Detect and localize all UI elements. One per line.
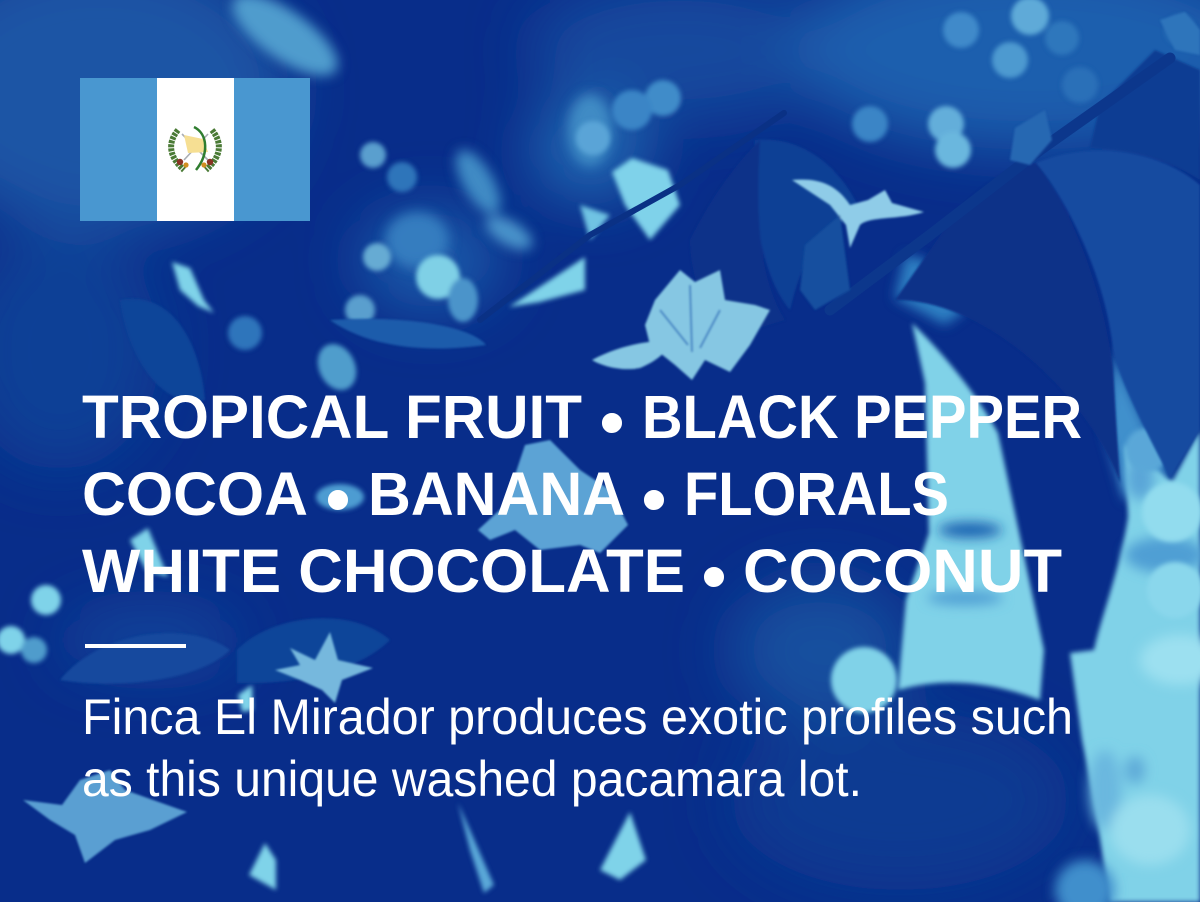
far right leaf [1036, 151, 1200, 478]
divider rule [85, 644, 186, 648]
heading: tasting notes: WHITE CHOCOLATE [82, 537, 685, 605]
flower lower left [275, 632, 373, 703]
heading: tasting notes: TROPICAL FRUIT [82, 383, 582, 451]
description text: Finca El Mirador produces exotic profiles such [82, 689, 1073, 745]
heading: tasting notes: BLACK PEPPER [642, 383, 1082, 451]
bokeh lights [0, 0, 1200, 713]
heading: tasting notes: FLORALS [684, 460, 949, 528]
flower lower centre [478, 440, 628, 553]
upper right leaf [1090, 50, 1200, 180]
flag stripes [80, 78, 310, 221]
coat of arms [171, 127, 219, 170]
blue patches in bright area [927, 456, 1200, 902]
mid-blue areas [220, 0, 1170, 500]
large dark centre leaf [895, 163, 1120, 483]
heading: tasting notes: BANANA [368, 460, 625, 528]
heading: tasting notes [82, 383, 1082, 615]
bright patches behind branches [130, 158, 680, 893]
description text [82, 689, 1073, 807]
flower upper right [792, 180, 924, 248]
bright area lower right [580, 205, 1200, 902]
description text: as this unique washed pacamara lot. [82, 751, 862, 807]
heading: tasting notes: COCOA [82, 460, 308, 528]
flower centre [592, 270, 770, 380]
buds [1160, 12, 1200, 55]
foliage leaves [60, 50, 1200, 684]
flower bottom left [23, 770, 187, 863]
left leaves [120, 299, 205, 402]
branches [480, 58, 1170, 320]
heading: tasting notes: • [600, 383, 624, 461]
heading: tasting notes: COCONUT [743, 537, 1062, 605]
heading: tasting notes: • [326, 460, 350, 538]
middle leaf [754, 139, 860, 310]
heading: tasting notes: • [642, 460, 666, 538]
heading: tasting notes: • [702, 537, 726, 615]
flag of Guatemala [80, 78, 310, 221]
